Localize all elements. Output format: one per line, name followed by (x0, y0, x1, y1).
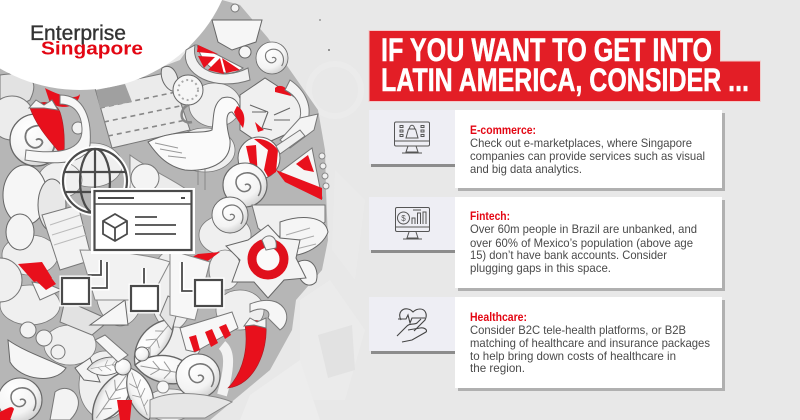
panel: e-commerce (369, 110, 725, 191)
icon: dollar sign: $ (401, 214, 406, 223)
icon tab (369, 110, 455, 164)
logo: Enterprise Singapore: Enterprise (30, 22, 126, 45)
title banner (369, 30, 760, 102)
doodle: maraca (238, 130, 305, 179)
text: fintech: Fintech: (470, 209, 510, 223)
doodle: orange slice (197, 45, 243, 74)
text: fintech (470, 209, 697, 275)
doodle: feather shapes (280, 218, 328, 285)
logo panel: white ellipse (0, 0, 235, 90)
panel: fintech (369, 197, 725, 291)
doodle: left fruit and leaves (0, 165, 92, 302)
title banner: IF YOU WANT TO GET INTO (381, 32, 712, 68)
doodle: bowl and vegetables bottom left (0, 300, 128, 420)
text: healthcare: matching of healthcare and insurance packages (470, 336, 710, 350)
icon: globe (63, 149, 127, 213)
text: e-commerce (470, 123, 705, 176)
doodle: bottom chili and swirl (150, 300, 287, 418)
doodle: palm flower (83, 310, 201, 420)
icon: monitor with lock (394, 122, 430, 153)
icon: monitor with chart (396, 208, 430, 239)
icon: digital network globe and window (62, 149, 222, 311)
doodle: mask (240, 78, 318, 148)
text: healthcare (470, 310, 710, 375)
logo: Enterprise Singapore (30, 22, 143, 58)
text: fintech: 15) don’t have bank accounts. Consider (470, 248, 667, 262)
text: fintech: Over 60m people in Brazil are unbanked, and (470, 222, 697, 236)
doodle: sun with red ring (226, 225, 306, 298)
panel: healthcare (369, 297, 725, 391)
doodle: left spiral and chili (0, 74, 90, 166)
icon tab (369, 297, 455, 351)
text: e-commerce: companies can provide services such as visual (470, 149, 705, 163)
doodle: pattern band (95, 72, 190, 148)
text: healthcare: to help bring down costs of healthcare in (470, 349, 676, 363)
text: healthcare: Healthcare: (470, 310, 527, 324)
doodle: flamingo (148, 97, 244, 190)
doodle: red tent (276, 148, 329, 200)
text: e-commerce: Check out e-marketplaces, where Singapore (470, 136, 692, 150)
doodle illustration (0, 0, 329, 420)
doodle base shape (0, 0, 328, 420)
text: fintech: plugging gaps in this space. (470, 261, 611, 275)
text: healthcare: Consider B2C tele-health platforms, or B2B (470, 323, 686, 337)
text: e-commerce: E-commerce: (470, 123, 536, 137)
logo: Enterprise Singapore: Singapore (41, 38, 143, 58)
doodle: striped cloth (160, 252, 238, 352)
icon: browser window (91, 188, 195, 254)
icon: heart on hand (397, 309, 427, 342)
icon: node squares (62, 278, 222, 311)
doodle: top right cup and spirals (185, 4, 288, 84)
text: healthcare: the region. (470, 361, 525, 375)
icon tab (369, 197, 455, 250)
text: e-commerce: and big data analytics. (470, 162, 582, 176)
icon: connectors (88, 260, 195, 291)
doodle: centre white shapes (80, 155, 210, 320)
doodle: spirals right (212, 163, 325, 236)
doodle: light filler shapes (0, 83, 264, 420)
text: fintech: over 60% of Mexico’s population (above age (470, 236, 693, 250)
doodle: nut and round fruit (161, 66, 203, 105)
